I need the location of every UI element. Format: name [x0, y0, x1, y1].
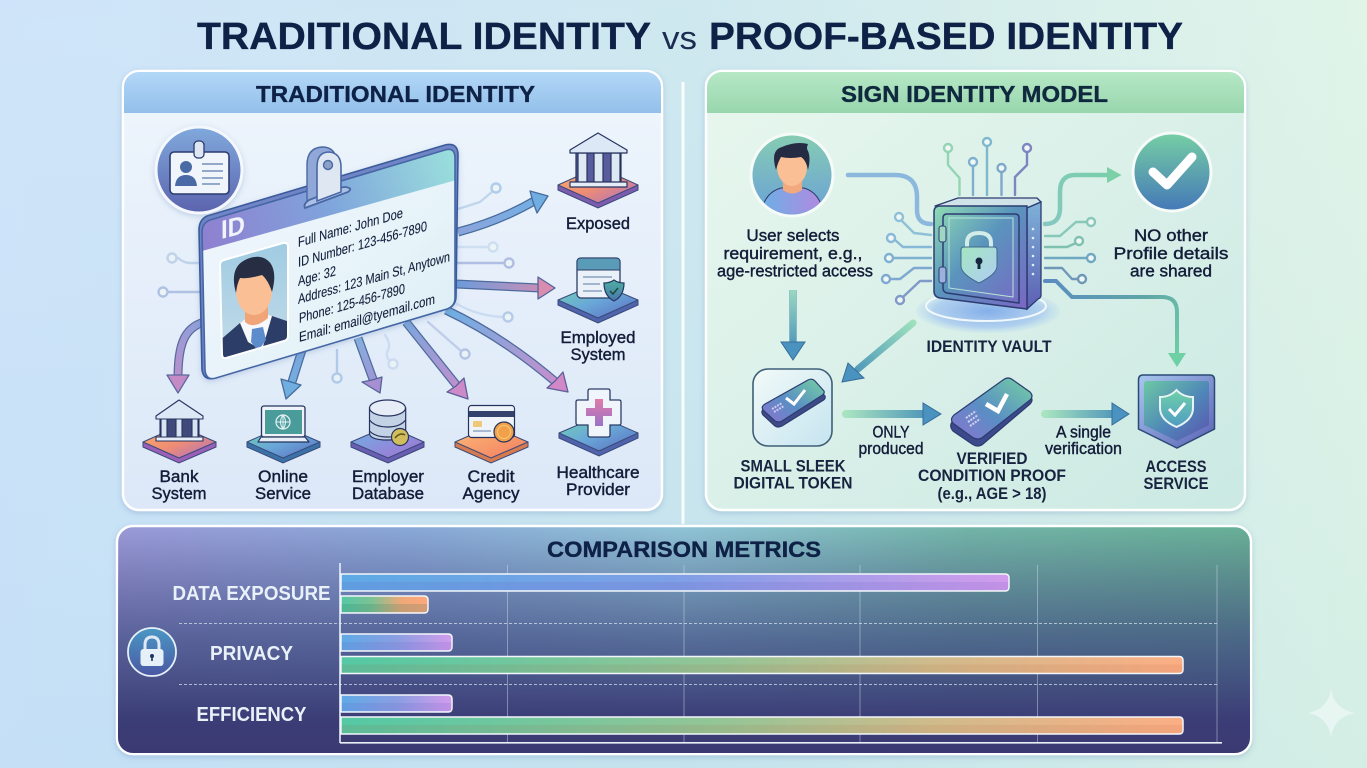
circuit traces around vault [882, 138, 1095, 304]
bank system node [143, 400, 216, 503]
title [197, 16, 1183, 58]
icon: database [370, 400, 408, 446]
label: verified condition proof: VERIFIED [956, 450, 1028, 468]
label: verified condition proof [918, 450, 1066, 503]
label: access service [1144, 458, 1208, 493]
arrow: card to exposed [458, 191, 548, 232]
title: vs [662, 20, 697, 56]
label: no other profile details: are shared [1130, 262, 1212, 280]
platform [559, 416, 638, 456]
arrow: vault to no other details [1045, 167, 1122, 224]
label: user selects requirement [717, 227, 873, 280]
platform [247, 426, 320, 463]
label line: Provider [566, 481, 631, 499]
heading: comparison metrics: COMPARISON METRICS [547, 537, 821, 562]
label: only produced [858, 424, 924, 458]
arrow: proof to access [1045, 403, 1129, 425]
platform [455, 426, 528, 463]
label: user selects requirement: User selects [746, 227, 840, 245]
arrow: token to proof [846, 403, 941, 425]
arrow: vault to token [842, 323, 913, 382]
label line: Agency [462, 485, 520, 503]
icon: window with shield [577, 258, 624, 301]
icon: user avatar [751, 134, 833, 216]
label: data exposure: DATA EXPOSURE [172, 583, 330, 605]
label: user selects requirement: requirement, e.g., [724, 245, 862, 263]
platform [143, 426, 216, 463]
photo frame [220, 243, 288, 358]
label: no other profile details: NO other [1134, 227, 1209, 245]
label: small sleek digital token: DIGITAL TOKEN [734, 474, 852, 492]
exposed node [558, 133, 638, 233]
label: small sleek digital token: SMALL SLEEK [740, 458, 846, 476]
bar: sign efficiency [341, 717, 1183, 734]
label: healthcare provider: Healthcare [556, 464, 640, 482]
label: identity vault: IDENTITY VAULT [926, 338, 1052, 356]
arrow: user to vault connector [848, 175, 931, 224]
icon: digital token box [753, 369, 832, 446]
label: access service: SERVICE [1144, 475, 1208, 493]
label: a single verification: verification [1045, 440, 1122, 458]
bar: sign data exposure [341, 596, 428, 613]
icon: laptop [258, 406, 309, 442]
panel header: traditional identity: TRADITIONAL IDENTITY [256, 81, 535, 107]
bar: traditional efficiency [341, 695, 452, 712]
credit agency node [455, 406, 528, 503]
panel header: sign identity model: SIGN IDENTITY MODEL [841, 81, 1108, 107]
vault body [934, 198, 1041, 309]
card details: Age: 32 [298, 263, 336, 290]
title: PROOF-BASED IDENTITY [709, 16, 1183, 58]
healthcare provider node [556, 389, 640, 499]
arrow: user down to token [781, 290, 805, 360]
label: bank system: Bank [160, 468, 199, 486]
icon: identity vault safe [916, 198, 1060, 333]
label: only produced: produced [858, 440, 924, 458]
bar: sign privacy [341, 656, 1183, 674]
card details: Email: email@tyemail.com [299, 292, 435, 346]
card details: ID Number: 123-456-7890 [298, 219, 427, 271]
icon: padlock circle [128, 628, 176, 676]
id card [190, 140, 470, 390]
label: only produced: ONLY [872, 424, 910, 442]
icon: verified proof token [951, 378, 1032, 446]
panel: comparison metrics [117, 526, 1251, 754]
bar chart: privacy [341, 634, 1183, 674]
panel header: sign identity model [707, 72, 1244, 113]
panel: traditional identity [123, 71, 662, 510]
icon: green check circle [1133, 133, 1211, 211]
card clip [304, 147, 350, 208]
label: a single verification [1045, 424, 1122, 458]
card details: Full Name: John Doe [298, 206, 403, 251]
label: no other profile details [1114, 227, 1228, 280]
icon: access service shield [1138, 375, 1214, 448]
portrait photo [221, 244, 287, 358]
faint circuit traces [158, 184, 514, 382]
label line: System [570, 346, 626, 364]
bar chart: data exposure [341, 574, 1009, 613]
label line: System [152, 485, 206, 503]
card outline [202, 149, 455, 379]
icon: credit card [468, 406, 514, 442]
label: access service: ACCESS [1146, 458, 1206, 476]
icon: bank [570, 133, 627, 187]
label: verified condition proof: CONDITION PROOF [918, 467, 1066, 485]
card details: Address: 123 Main St, Anytown [298, 249, 450, 308]
label line: Service [255, 485, 311, 503]
arrow: vault to access service [1045, 281, 1186, 367]
label: verified condition proof: (e.g., AGE > 18) [938, 485, 1046, 503]
panel header: traditional identity [124, 72, 661, 113]
label: a single verification: A single [1056, 424, 1111, 442]
label: efficiency: EFFICIENCY [196, 704, 307, 726]
arrow: card to healthcare provider [446, 310, 568, 392]
label: exposed: Exposed [566, 215, 630, 233]
bar: traditional privacy [341, 634, 452, 651]
label: privacy: PRIVACY [210, 643, 294, 665]
icon: id badge circle [156, 127, 242, 213]
icon: padlock shield [961, 233, 997, 283]
label: employer database: Employer [352, 468, 425, 486]
employer database node [351, 400, 425, 503]
panel: sign identity model [706, 71, 1245, 510]
card details [298, 206, 450, 346]
online service node [247, 406, 320, 503]
arrow: card to bank system [167, 322, 204, 393]
arrow: card to credit agency [406, 322, 468, 399]
card edge [199, 144, 458, 379]
label: user selects requirement: age-restricted access [717, 262, 873, 280]
card details: Phone: 125-456-7890 [299, 281, 405, 327]
label: small sleek digital token [734, 458, 852, 492]
icon: bank [156, 400, 203, 441]
card face [202, 150, 454, 378]
icon: medical cross [576, 389, 621, 437]
label: online service: Online [258, 468, 308, 486]
icon: sparkle watermark [1308, 689, 1355, 737]
card id label: ID [221, 209, 245, 245]
bar: traditional data exposure [341, 574, 1009, 591]
label: no other profile details: Profile details [1114, 245, 1228, 263]
arrow: card to employer database [358, 338, 382, 393]
label: employed system: Employed [560, 329, 636, 347]
arrow: card to employed system [456, 277, 555, 299]
bar chart: efficiency [341, 695, 1183, 734]
platform [558, 167, 638, 208]
platform [558, 283, 638, 323]
label line: Database [352, 485, 424, 503]
vault halo [916, 289, 1060, 333]
label: credit agency: Credit [468, 468, 515, 486]
arrow: card to online service [281, 350, 302, 399]
platform [351, 426, 424, 463]
employed system node [558, 258, 638, 364]
title: TRADITIONAL IDENTITY [197, 16, 651, 58]
